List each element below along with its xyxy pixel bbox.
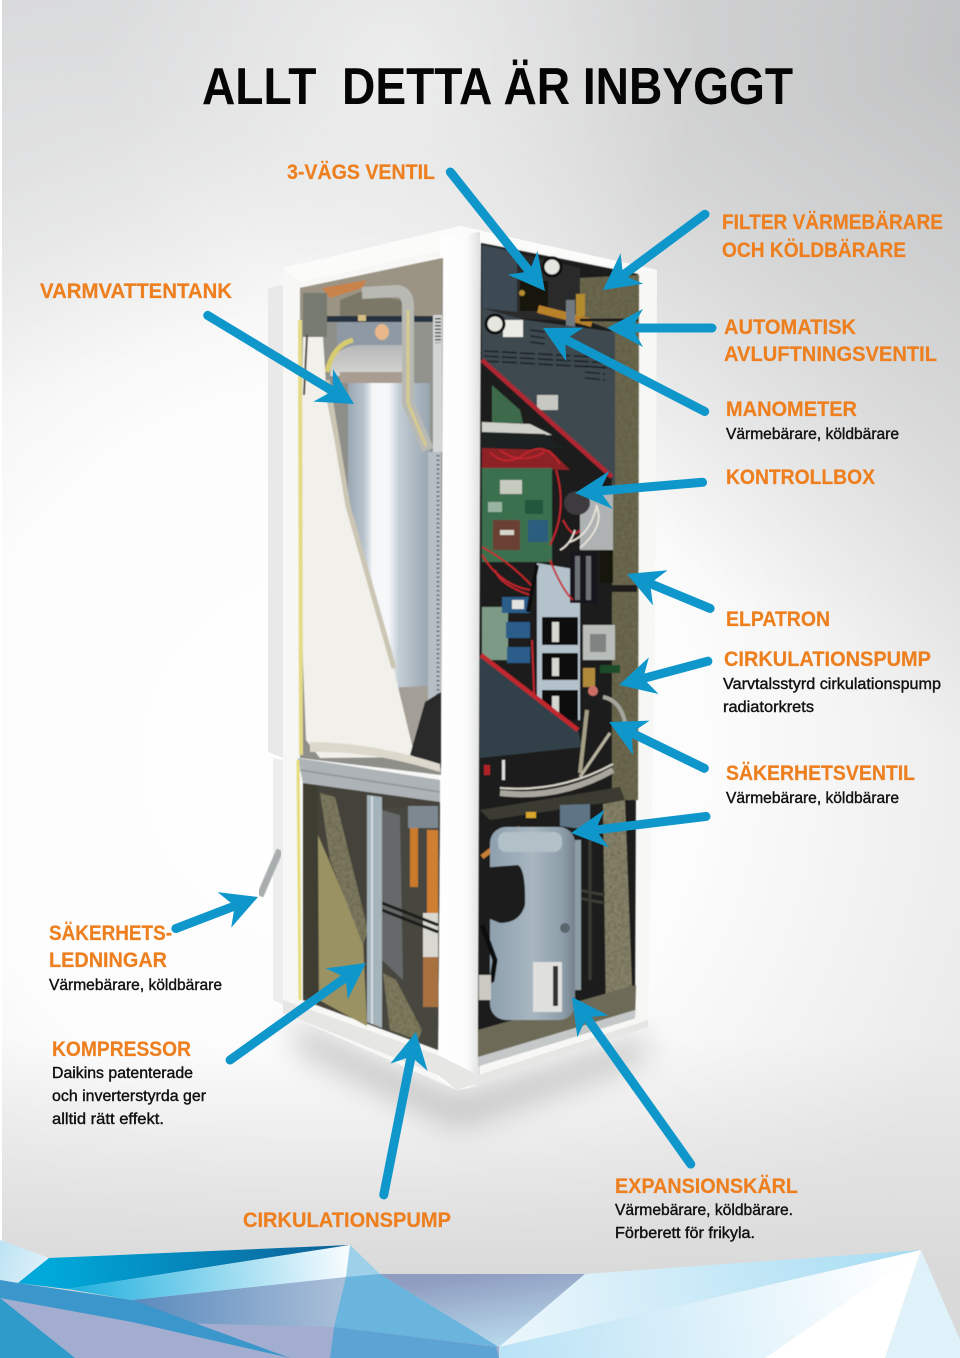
arrows [169,160,717,1199]
arrow: kompressor [219,948,377,1075]
label: cirkulationspump radiatorkrets: CIRKULATIONSPUMP [724,648,931,671]
lower control box panel [480,655,582,758]
label: expansionskärl: Förberett för frikyla. [615,1225,755,1242]
arrow: cirkulationspump bottom [365,1028,435,1199]
arrow: varmvattentank [198,299,364,420]
rock wool insulation [580,275,639,800]
perforated side panel [428,315,442,750]
label: cirkulationspump: CIRKULATIONSPUMP [243,1209,451,1232]
footer polygon graphic [0,1240,960,1358]
right window [478,243,639,1066]
expansion tank [490,827,581,1020]
metal shield [580,492,613,550]
label: manometer: Värmebärare, köldbärare [726,426,899,443]
label: kompressor: alltid rätt effekt. [52,1111,164,1128]
label: 3-vägs ventil: 3-VÄGS VENTIL [287,161,435,184]
left upper window: hot water tank [299,258,443,775]
label: kompressor [52,1038,207,1128]
metal vertical bar [367,795,382,1028]
label: elpatron: ELPATRON [726,608,830,631]
label: cirkulationspump radiatorkrets: radiatorkrets [723,699,814,716]
tank cylinder [327,340,430,745]
label: manometer [726,398,899,443]
label: säkerhetsledningar [49,922,222,994]
label: automatisk avluftningsventil [724,316,937,366]
component cluster [303,293,433,347]
label: säkerhetsventil [726,762,915,807]
label: kompressor: och inverterstyrda ger [52,1088,207,1105]
label: kontrollbox: KONTROLLBOX [726,466,875,489]
arrow: 3-väg ventil [436,160,560,303]
label: säkerhetsledningar: LEDNINGAR [49,949,167,972]
label: säkerhetsledningar: SÄKERHETS- [49,922,172,945]
valves and hoses [580,625,625,777]
arrow: säkerhetsledningar [169,879,265,946]
electronics bay [482,360,613,730]
label: säkerhetsventil: Värmebärare, köldbärare [726,790,899,807]
label: cirkulationspump radiatorkrets: Varvtalsstyrd cirkulationspump [723,676,941,693]
pump motor [480,865,525,923]
rear bars [578,840,605,980]
insulation sheet [299,337,417,758]
label: filter [722,211,943,262]
wiring [482,449,580,715]
dark cables near base [410,692,441,768]
arrow: elpatron [620,556,717,626]
control box body [482,308,615,492]
label: automatisk avluftningsventil: AVLUFTNINGSVENTIL [724,343,937,366]
label: manometer: MANOMETER [726,398,857,421]
red accent lines [482,360,612,477]
pipe behind insulation [408,322,433,452]
arrow: kontrollbox [573,463,704,512]
label: säkerhetsledningar: Värmebärare, köldbärare [49,977,222,994]
arrow: säkerhetsventil lower [569,798,708,852]
metal cross bar [298,758,440,802]
label: expansionskärl [615,1175,798,1242]
label: säkerhetsventil: SÄKERHETSVENTIL [726,762,915,785]
pressure gauges [486,258,561,333]
floor [478,985,636,1066]
left lower window: compressor bay [298,758,440,1050]
label: cirkulationspump radiatorkrets [723,648,941,716]
title: ALLT DETTA ÄR INBYGGT [202,58,793,116]
safety lines fitting [260,850,280,896]
label: filter: FILTER VÄRMEBÄRARE [722,211,943,234]
cabinet frame [268,226,657,1090]
red wire bundle [482,448,570,470]
arrow: filter [592,199,716,305]
floor shadow [290,1020,650,1125]
label: filter: OCH KÖLDBÄRARE [722,239,906,262]
arrow: säkerhetsventil top [601,705,713,785]
arrow: cirkulationspump radiator [614,643,713,703]
top hydraulic section [482,245,638,332]
heat pump unit photo [260,226,657,1125]
vent slots [484,330,612,380]
label: automatisk avluftningsventil: AUTOMATISK [724,316,856,339]
label: expansionskärl: Värmebärare, köldbärare. [615,1202,793,1219]
green board [482,468,552,562]
label: kompressor: KOMPRESSOR [52,1038,191,1061]
corrugated hose [362,291,428,450]
label: expansionskärl: EXPANSIONSKÄRL [615,1175,798,1198]
arrow: manometer [534,311,713,428]
arrow: expansionskärl [557,986,706,1175]
label: kompressor: Daikins patenterade [52,1065,193,1082]
arrow: avluftningsventil [607,309,712,347]
wire bundle and shelf [480,760,625,857]
label: varmvattentank: VARMVATTENTANK [40,280,232,303]
